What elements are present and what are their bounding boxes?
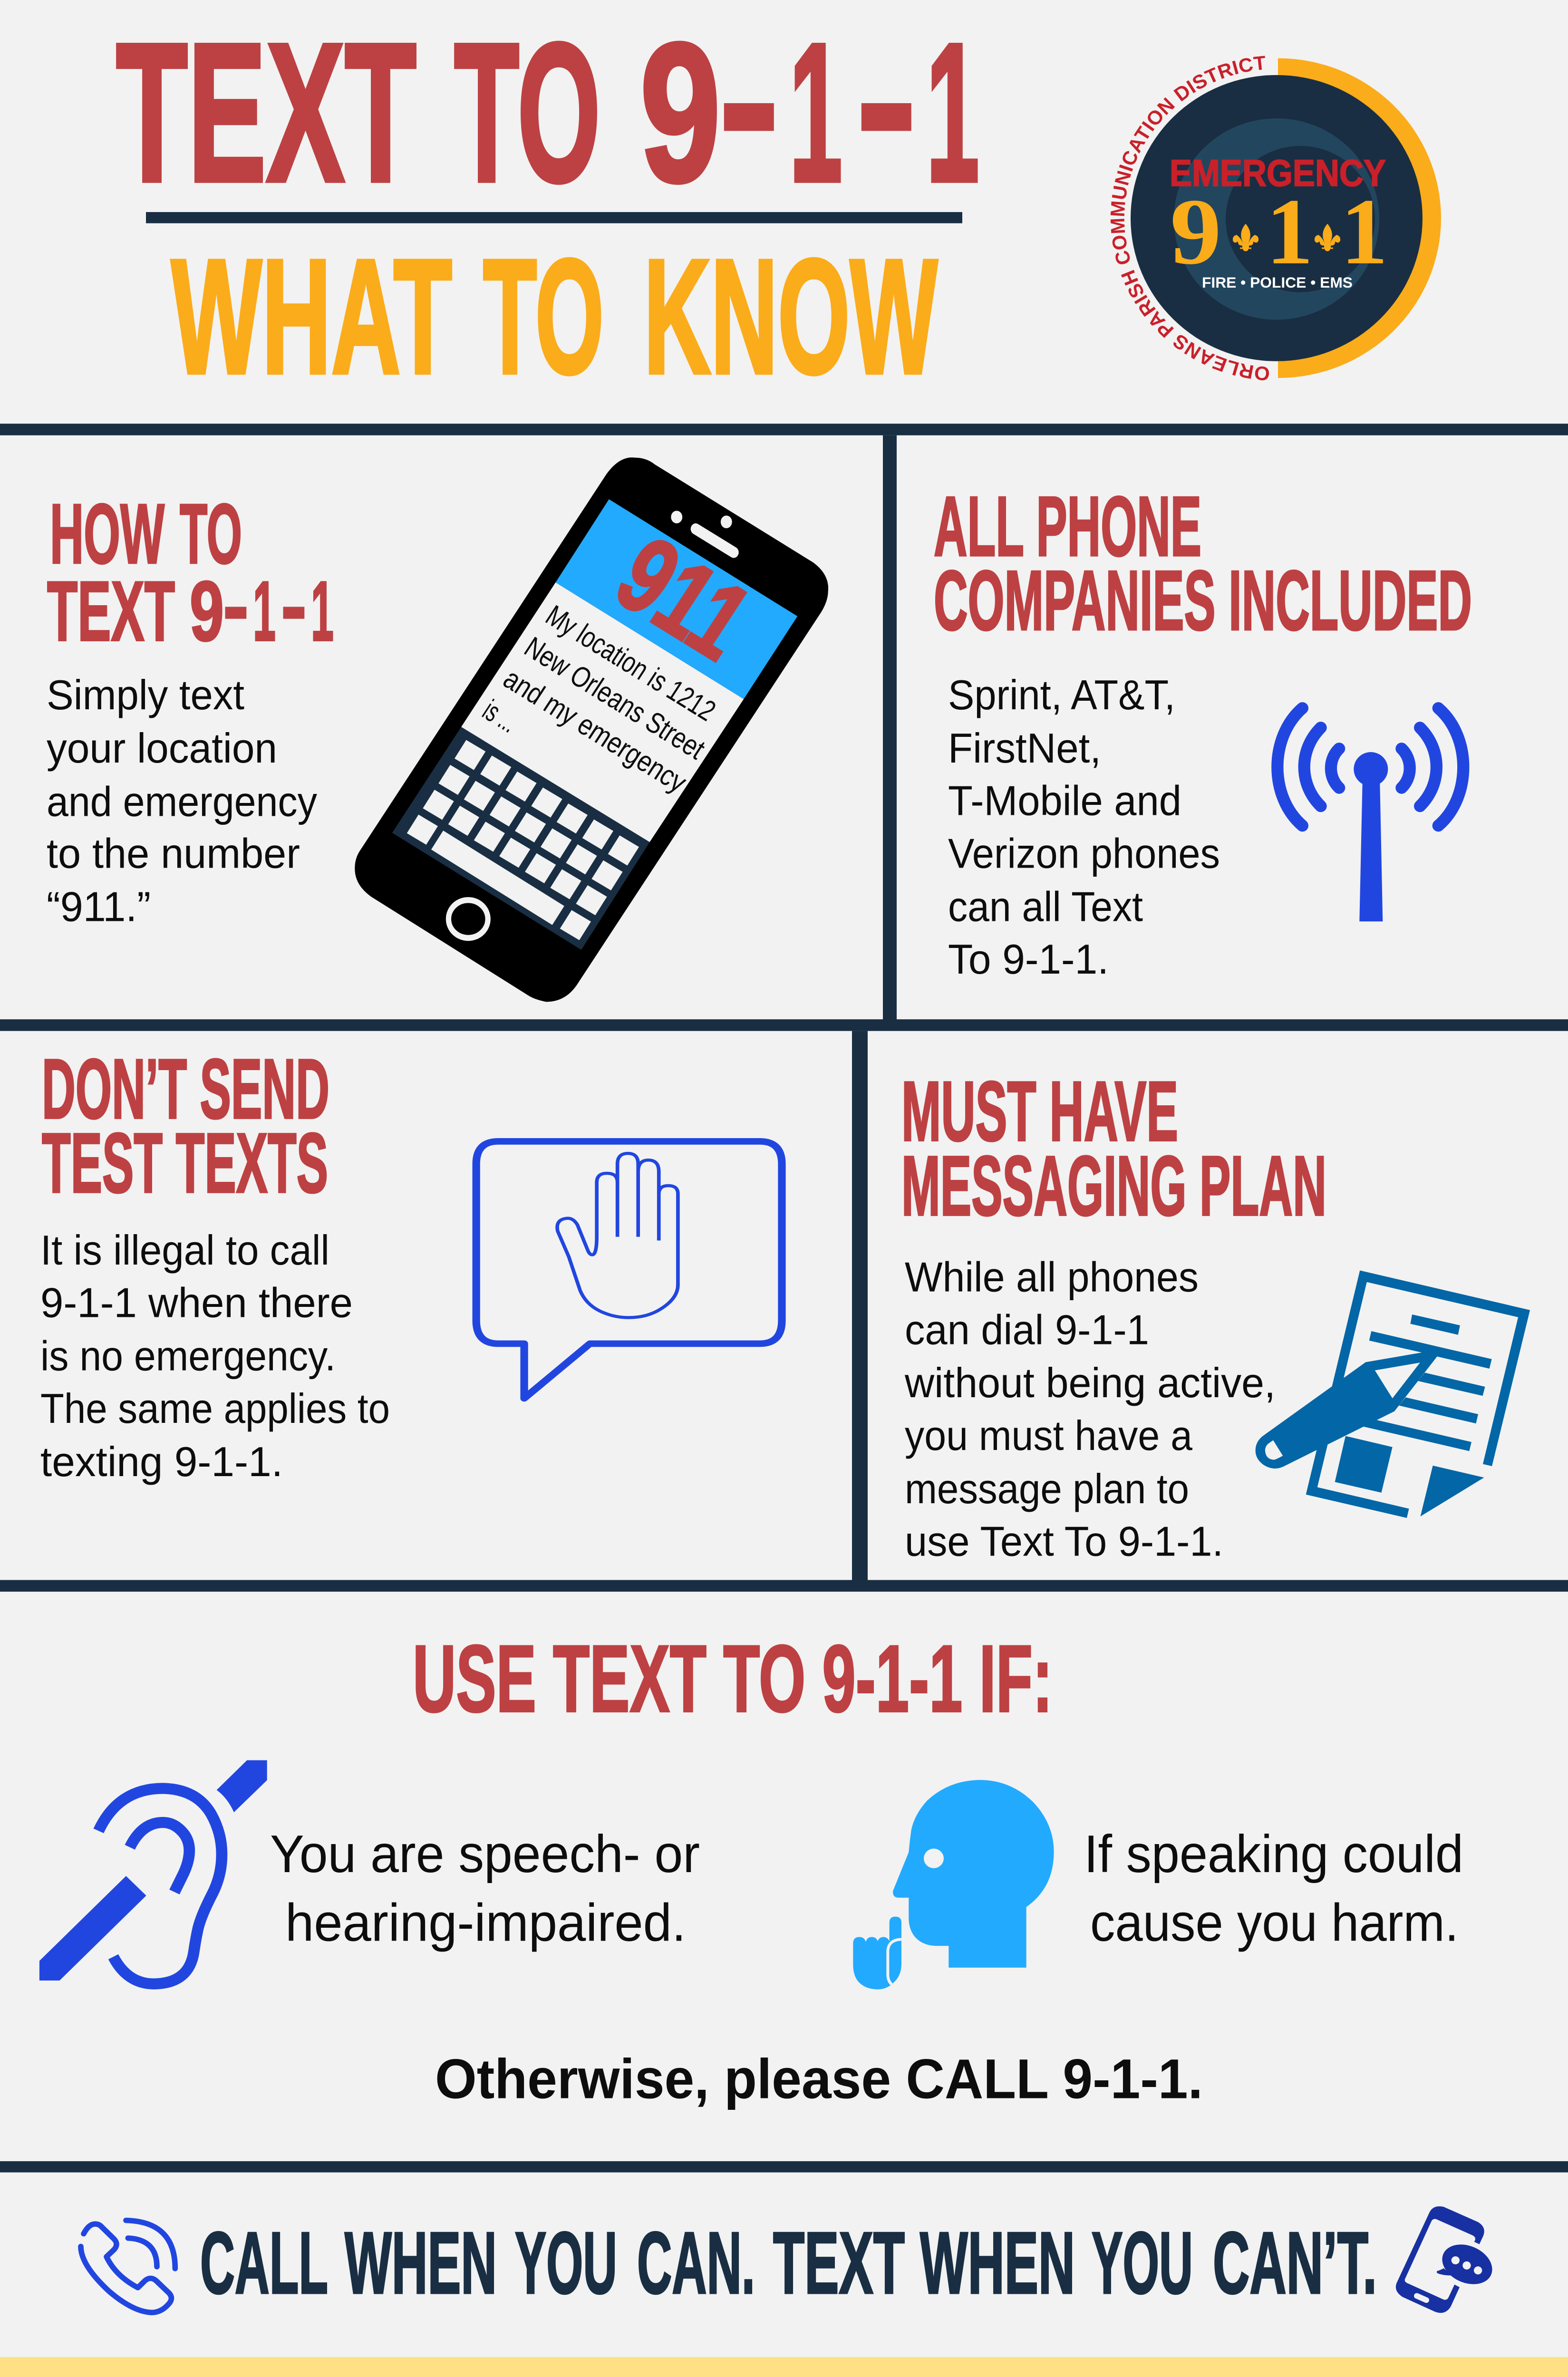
text: carriers: T-Mobile and [948,777,1181,824]
text: speech or hearing impaired: hearing-impaired. [285,1893,686,1952]
subtitle: What to know: TO [483,225,604,408]
slogan text: WHEN [345,2214,497,2312]
slogan text: CAN. [637,2214,755,2312]
icon: head with finger to lips [853,1780,1054,1990]
text: instructions: “911.” [47,883,151,930]
text: instructions: and emergency [47,778,317,825]
heading: must have messaging plan [901,1064,1326,1233]
text: illegal warning: The same applies to [40,1385,390,1432]
text: carriers: can all Text [948,883,1143,930]
divider: below header [0,424,1568,435]
text: speaking could cause harm: cause you harm. [1090,1893,1459,1952]
divider: middle horizontal [0,1019,1568,1031]
text: instructions: Simply text [47,671,244,718]
heading: how to text: 1 [253,564,276,659]
text: plan requirement: can dial 9-1-1 [905,1306,1149,1353]
panel: use text to 9-1-1 if [39,1625,1463,2110]
slogan text: WHEN [920,2214,1075,2312]
slogan text: TEXT [773,2214,905,2312]
text: plan requirement: use Text To 9-1-1. [905,1517,1223,1565]
heading: all phone companies [934,479,1472,648]
heading: how to text: 9 [190,564,224,659]
slogan text: YOU [1092,2214,1193,2312]
icon: smartphone with text message: is ... [477,694,524,739]
text: carriers: Verizon phones [948,830,1220,877]
text: illegal warning [40,1227,390,1485]
text: illegal warning: 9-1-1 when there [40,1279,353,1326]
text: carriers: Sprint, AT&T, [948,671,1175,718]
icon: smartphone with text message: and my emergency [498,662,693,799]
title: Text to 9-1-1: TEXT [116,2,416,223]
text: carriers [948,671,1220,983]
icon: cell antenna [1278,708,1463,921]
text: carriers: To 9-1-1. [948,936,1109,983]
panel: all phone companies included [934,479,1472,983]
panel: how to text 9-1-1 [47,457,828,1002]
text: instructions: your location [47,725,277,772]
slogan text: YOU [515,2214,617,2312]
text: illegal warning: texting 9-1-1. [40,1438,283,1485]
text: instructions: to the number [47,830,300,877]
heading: how to text: HOW [50,487,165,581]
icon: hearing impaired ear [39,1760,267,1984]
heading: all phone companies: ALL PHONE [934,479,1201,574]
subtitle: What to know: WHAT [171,225,452,408]
heading: don't send test texts: DON’T SEND [42,1042,329,1137]
heading: how to text: - [223,559,249,653]
title: Text to 9-1-1: 1 [789,2,842,223]
divider: above footer [0,2161,1568,2173]
text: instructions [47,671,317,930]
icon: document and pencil [1256,1270,1530,1518]
heading: how to text: TEXT [47,564,175,659]
logo: Emergency 9-1-1 seal: EMERGENCY [1170,152,1386,194]
slogan text: CAN’T. [1213,2214,1377,2312]
icon: smartphone with text message: 911 [597,514,771,682]
heading: how to text: TO [180,487,242,581]
text: speech or hearing impaired: You are speech- or [270,1824,700,1884]
logo: Emergency 9-1-1 seal [1106,51,1441,385]
slogan text: CALL [200,2214,328,2312]
icon: smartphone with text message: New Orleans Street [519,630,711,765]
icon: speech bubble with raised hand [476,1141,782,1398]
logo: Emergency 9-1-1 seal: 1 [1341,180,1388,284]
heading: don't send test texts: TEST TEXTS [42,1116,328,1210]
panel: how to text 9-1-1: 1 [311,564,334,659]
heading: don't send test texts [42,1042,329,1210]
heading: how to text [47,487,334,659]
text: speech or hearing impaired [270,1824,700,1952]
text: 1 [926,2,979,223]
logo: Emergency 9-1-1 seal: 9 [1170,180,1221,284]
divider: top row vertical [883,435,897,1021]
text: speaking could cause harm [1084,1824,1463,1952]
text: plan requirement: you must have a [905,1412,1192,1459]
text: illegal warning: It is illegal to call [40,1227,329,1274]
icon: ringing phone [81,2221,175,2312]
text: otherwise call: Otherwise, please CALL 9-1-1. [435,2048,1203,2110]
text: plan requirement [904,1253,1276,1565]
bottom yellow band [0,2357,1568,2377]
icon: smartphone with text message [355,457,828,1002]
divider: below second row [0,1580,1568,1592]
text: plan requirement: without being active, [904,1359,1276,1406]
text: carriers: FirstNet, [948,725,1101,772]
divider: second row vertical [852,1031,868,1581]
text: plan requirement: message plan to [905,1465,1189,1512]
logo: Emergency 9-1-1 seal: 1 [1266,180,1313,284]
icon: smartphone with text message: My location is 1212 [540,599,722,727]
title rule [146,212,962,223]
subtitle: What to know: KNOW [644,225,939,408]
icon: phone with chat bubble [1396,2206,1499,2313]
text: plan requirement: While all phones [905,1253,1199,1300]
logo: Emergency 9-1-1 seal: FIRE • POLICE • EMS [1202,274,1353,291]
panel: don't send test texts [40,1042,782,1485]
heading: use text if: USE TEXT TO 9-1-1 IF: [413,1625,1053,1732]
logo: Emergency 9-1-1 seal: ORLEANS PARISH COMMUNICATION DISTRICT [1106,51,1271,385]
title: Text to 9-1-1: TO [454,2,600,223]
footer: call or text slogan [81,2206,1499,2313]
title: Text to 9-1-1: 9 [640,2,721,223]
text: illegal warning: is no emergency. [40,1332,336,1379]
text: speaking could cause harm: If speaking could [1084,1824,1463,1884]
panel: must have messaging plan [901,1064,1530,1565]
heading: how to text: - [281,559,307,653]
heading: must have messaging plan: MUST HAVE [901,1064,1178,1159]
